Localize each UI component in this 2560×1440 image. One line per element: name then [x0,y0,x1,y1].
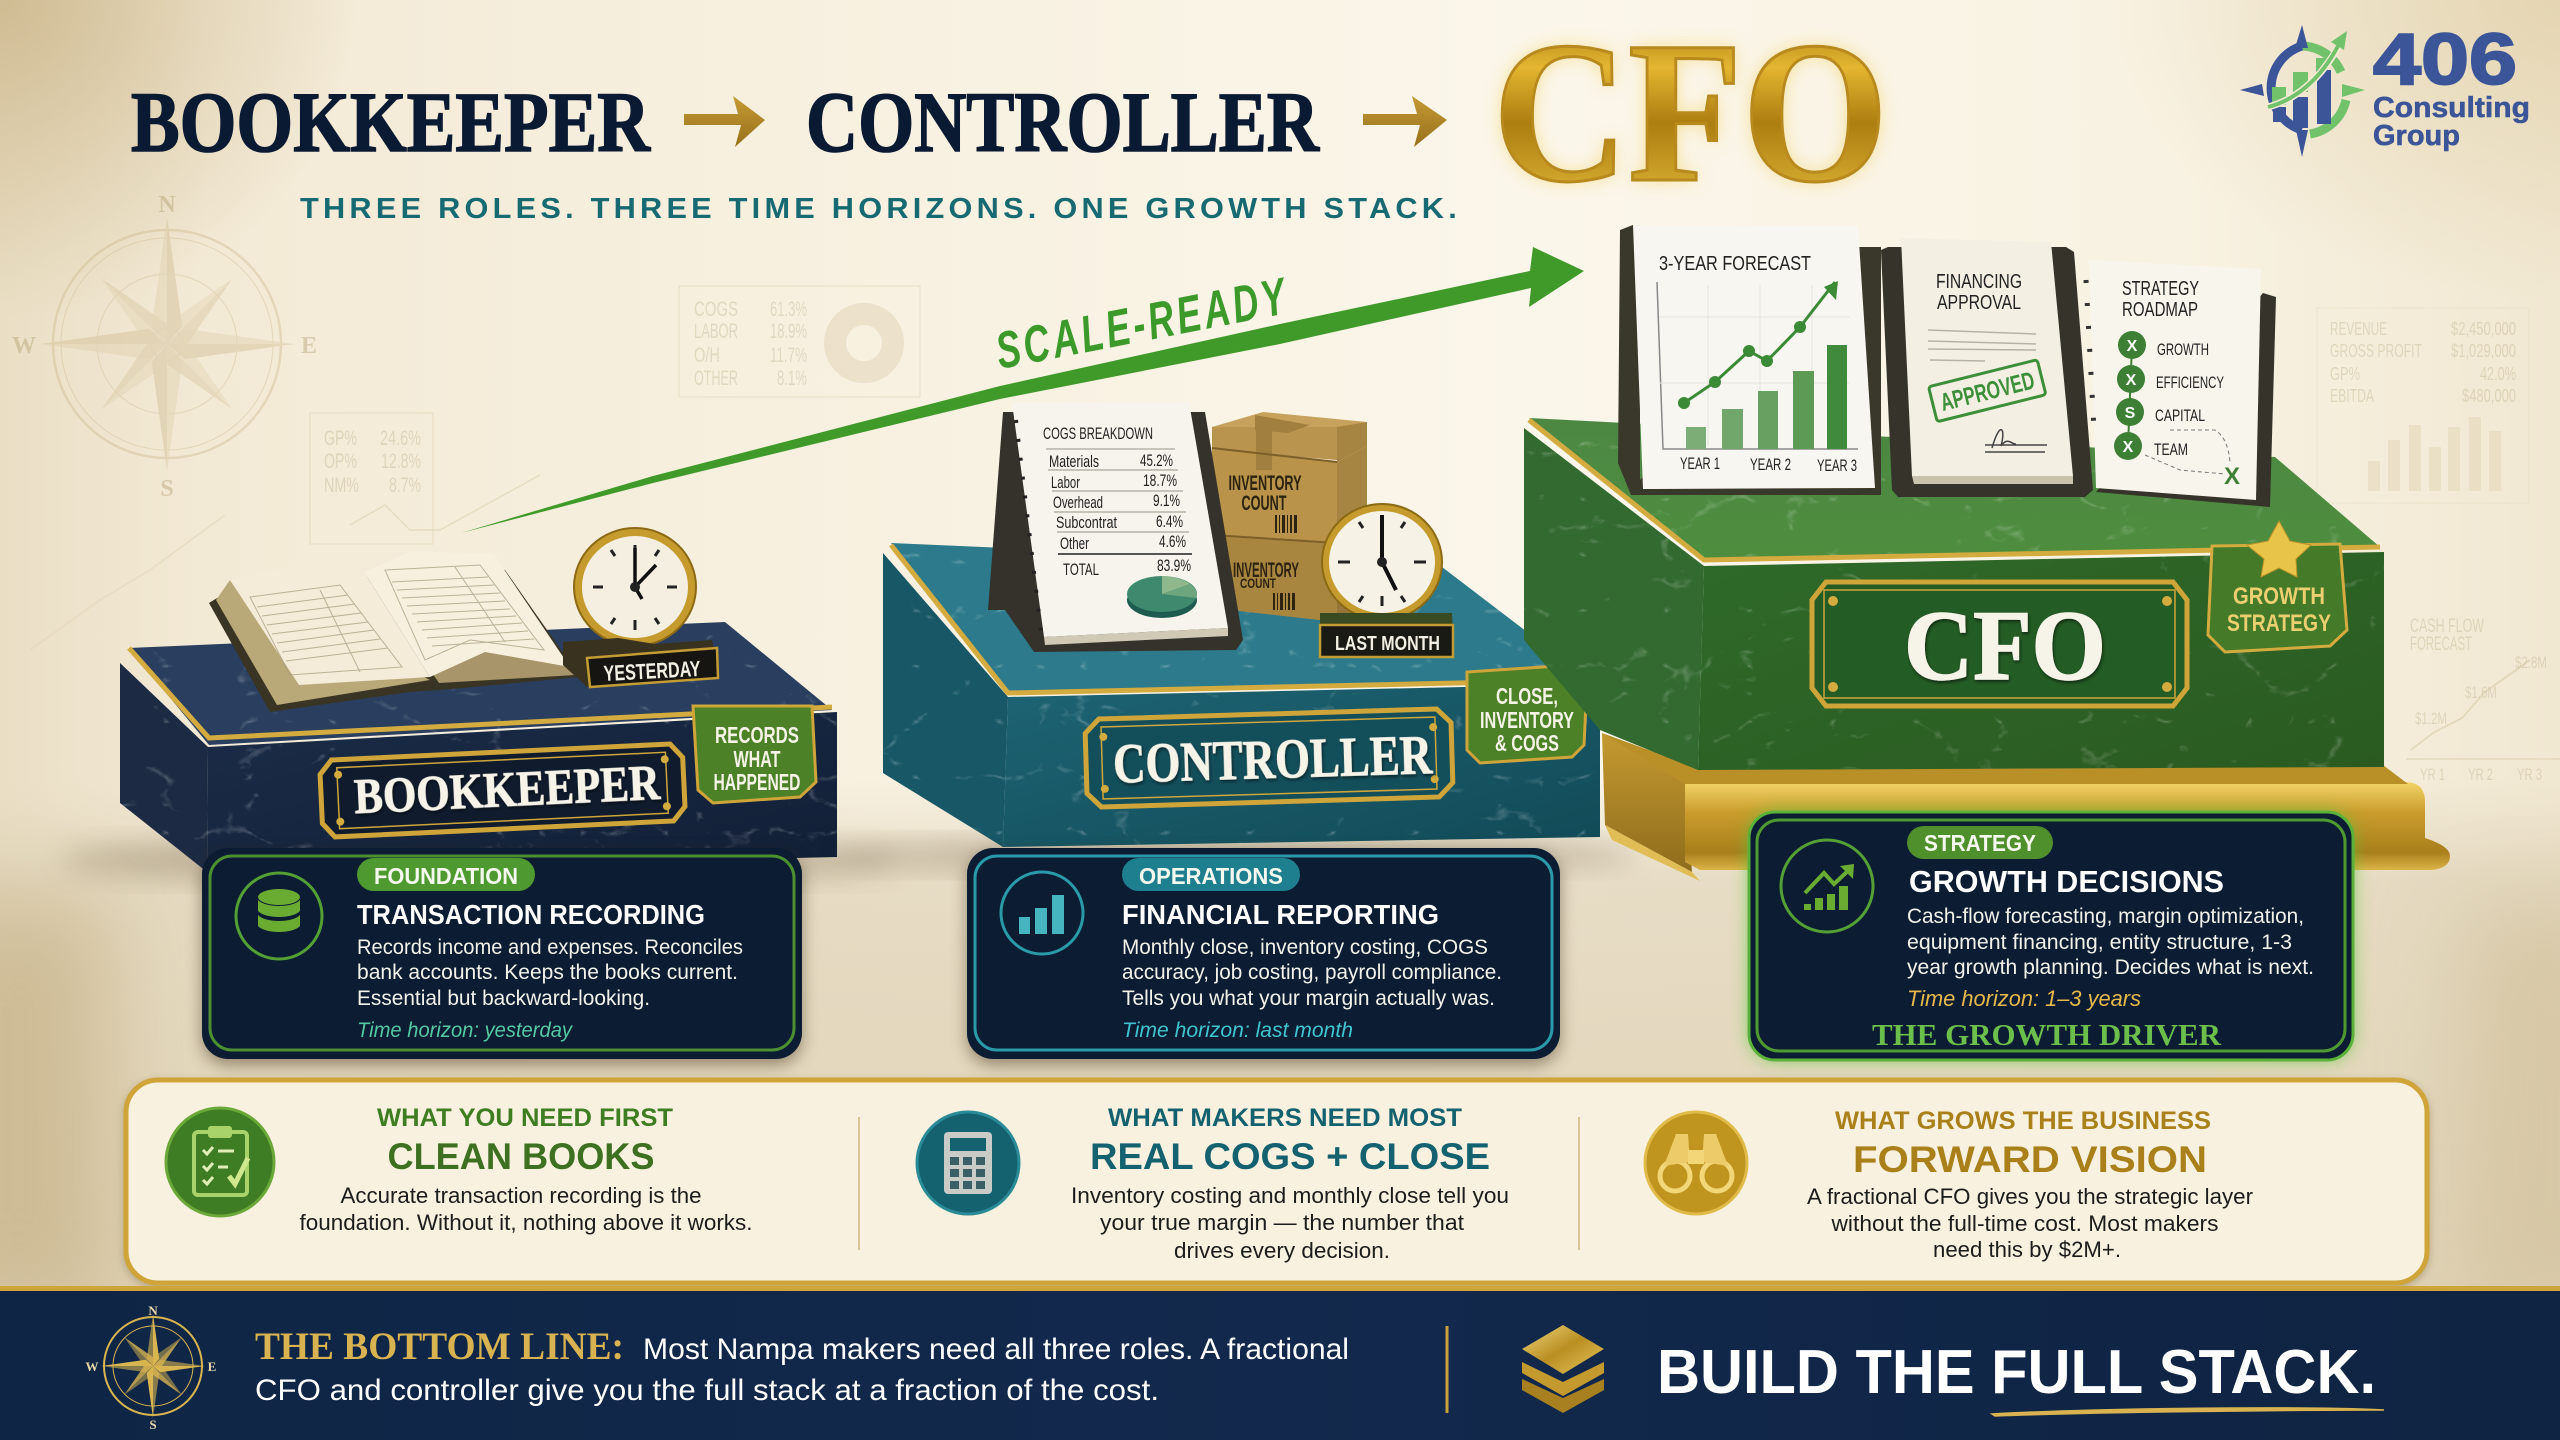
icon: open ledger book [209,552,580,712]
icon: gold layers [1522,1325,1604,1413]
icon: inventory boxes: INVENTORY [1228,472,1302,495]
pill: foundation [357,858,535,891]
faint P&L table: GROSS PROFIT [2330,341,2422,361]
arrow: bookkeeper to controller [684,96,765,147]
logo: 406 Consulting Group: 406 [2373,20,2517,100]
pill: operations [1122,858,1300,891]
column: clean books [166,1104,752,1235]
faint COGS table: 61.3% [770,298,807,321]
icon: calculator [917,1112,1019,1214]
document: strategy roadmap: EFFICIENCY [2156,373,2224,392]
body text: accuracy, job costing, payroll compliance. [1122,961,1502,984]
body text: equipment financing, entity structure, 1-3 [1907,931,2292,954]
pill: operations: OPERATIONS [1139,863,1283,889]
underline swoosh [1992,1408,2384,1416]
icon: gold compass: N [148,1303,158,1318]
tag: close, inventory and COGS [1467,664,1588,763]
document: financing approval: FINANCING [1936,271,2022,293]
column: clean books: foundation. Without it, nothing above it works. [300,1210,752,1235]
document: 3-year forecast: YEAR 1 [1680,454,1720,473]
faint P&L table [2317,308,2529,503]
body text [357,936,743,1010]
faint COGS table [679,286,920,397]
icon: COGS breakdown notebook: Overhead [1053,493,1103,512]
title: CFO [1493,0,1888,224]
icon: COGS breakdown notebook: Materials [1049,452,1099,471]
icon: COGS breakdown notebook: 83.9% [1157,556,1191,575]
column: forward vision: WHAT GROWS THE BUSINESS [1835,1107,2211,1135]
icon: COGS breakdown notebook: COGS BREAKDOWN [1043,424,1153,443]
column: real COGS and close: REAL COGS + CLOSE [1090,1136,1490,1177]
subtitle: THREE ROLES. THREE TIME HORIZONS. ONE GROWTH STACK. [300,193,1461,225]
column: real COGS and close: your true margin — the number that [1100,1210,1464,1235]
column: real COGS and close: Inventory costing and monthly close tell you [1071,1183,1509,1208]
stamp: approved: APPROVED [1937,367,2037,417]
time horizon: Time horizon: yesterday [357,1019,573,1042]
banner: bottom line [0,1286,2560,1440]
faint cash flow forecast: CASH FLOW [2410,616,2484,637]
document: financing approval: APPROVAL [1937,292,2021,314]
column: forward vision: without the full-time cost. Most makers [1830,1211,2218,1236]
faint margin table: 12.8% [381,450,421,473]
faint margin table: OP% [324,450,357,473]
faint COGS table: LABOR [694,320,738,343]
card: transaction recording [202,848,802,1059]
time horizon: Time horizon: 1–3 years [1907,986,2141,1011]
document: strategy roadmap: X [2126,372,2137,389]
icon: growth chart [1781,840,1873,932]
title: CONTROLLER [806,74,1320,170]
document: strategy roadmap: TEAM [2154,440,2188,459]
document: strategy roadmap [2086,260,2276,507]
faint COGS table: 11.7% [770,344,807,367]
title [131,0,1888,224]
tag: records what happened: WHAT [734,746,780,772]
column: clean books: CLEAN BOOKS [388,1136,654,1177]
plaque: bookkeeper: BOOKKEEPER [353,754,662,824]
pill: foundation: FOUNDATION [374,863,518,889]
tag: records what happened [693,706,816,803]
icon: gold star [2247,521,2311,577]
column: real COGS and close: WHAT MAKERS NEED MOST [1108,1104,1462,1132]
icon: bar chart [1001,872,1083,954]
bottom line text: Most Nampa makers need all three roles. A fractional [643,1333,1349,1366]
document: 3-year forecast: YEAR 2 [1750,455,1791,474]
icon: gold compass: E [208,1359,216,1374]
body text: Tells you what your margin actually was. [1122,987,1495,1010]
column: forward vision: A fractional CFO gives you the strategic layer [1807,1184,2253,1209]
heading: GROWTH DECISIONS [1909,864,2224,899]
document: strategy roadmap: S [2125,405,2136,422]
heading: FINANCIAL REPORTING [1122,899,1439,930]
plaque: bookkeeper [319,743,686,837]
column: forward vision: need this by $2M+. [1933,1237,2121,1262]
faint COGS table: COGS [694,298,738,321]
heading: TRANSACTION RECORDING [357,899,705,930]
faint cash flow forecast: YR 2 [2468,765,2493,784]
logo: 406 Consulting Group: Consulting [2373,92,2530,124]
faint cash flow forecast: FORECAST [2410,634,2472,655]
plaque: controller: CONTROLLER [1112,724,1433,796]
body text: Essential but backward-looking. [357,987,650,1010]
tagline: the growth driver: THE GROWTH DRIVER [1872,1017,2222,1052]
card: growth decisions [1749,812,2353,1060]
faint compass: S [160,476,174,502]
stamp: approved [1929,360,2046,422]
card: financial reporting [967,848,1560,1059]
call to action: BUILD THE FULL STACK. [1657,1338,2376,1407]
panel: what you need [126,1080,2427,1283]
podium block [1524,418,2384,770]
bottom line text: CFO and controller give you the full stack at a fraction of the cost. [255,1374,1159,1407]
icon: COGS breakdown notebook: 6.4% [1156,512,1183,531]
document: 3-year forecast: 3-YEAR FORECAST [1659,253,1811,275]
tag: growth strategy: STRATEGY [2227,610,2331,637]
document: strategy roadmap: X [2224,463,2240,490]
faint cash flow forecast: $1.6M [2465,683,2497,702]
faint P&L table: $2,450,000 [2451,319,2516,339]
faint compass: N [158,192,176,218]
icon: gold compass: W [86,1359,98,1374]
body text: Cash-flow forecasting, margin optimization, [1907,905,2304,928]
faint P&L table: $1,029,000 [2451,341,2516,361]
logo: 406 Consulting Group [2240,20,2530,157]
pie chart [1127,576,1197,618]
podium block [120,622,837,872]
icon: COGS breakdown notebook: 9.1% [1153,491,1180,510]
icon: gold compass: S [149,1417,157,1432]
faint cash flow forecast: $1.2M [2415,709,2447,728]
tag: growth strategy: GROWTH [2233,583,2325,610]
icon: database [236,873,322,959]
pill: strategy [1907,826,2053,859]
document: strategy roadmap: STRATEGY [2122,278,2199,300]
document: strategy roadmap: GROWTH [2157,340,2209,359]
document: 3-year forecast [1618,225,1881,495]
icon: inventory boxes: COUNT [1240,575,1276,591]
body text: bank accounts. Keeps the books current. [357,961,738,984]
document: financing approval [1881,238,2093,497]
body text [1122,936,1502,1010]
line chart [1678,281,1838,409]
body text [1907,905,2314,979]
body text: year growth planning. Decides what is next. [1907,956,2314,979]
column: real COGS and close [917,1104,1509,1263]
plaque: CFO: CFO [1904,590,2106,701]
icon: inventory boxes: INVENTORY [1233,559,1299,582]
label plate: last month [1320,613,1454,657]
bar chart [1686,345,1847,449]
faint cash flow forecast: YR 3 [2517,765,2542,784]
icon: COGS breakdown notebook: 4.6% [1159,532,1186,551]
time horizon: Time horizon: last month [1122,1019,1353,1042]
faint margin table: 24.6% [380,427,421,450]
podium: CFO [1524,225,2450,881]
faint margin table [30,413,540,650]
icon: COGS breakdown notebook: 45.2% [1140,451,1173,470]
faint P&L table: 42.0% [2480,364,2516,384]
bottom line text [255,1333,1349,1407]
tag: records what happened: RECORDS [715,722,799,748]
document: strategy roadmap: X [2127,338,2138,355]
pill: strategy: STRATEGY [1924,830,2036,856]
faint compass: W [12,333,36,359]
label plate: yesterday: YESTERDAY [603,656,701,686]
icon: inventory boxes [1212,412,1367,622]
tag: close, inventory and COGS: INVENTORY [1480,707,1574,733]
column: forward vision [1645,1107,2253,1262]
faint COGS table: OTHER [694,367,738,390]
gold base [1602,733,2450,881]
icon: COGS breakdown notebook: TOTAL [1063,560,1099,579]
title: BOOKKEEPER [131,74,651,170]
icon: binoculars [1645,1112,1747,1214]
faint P&L table: GP% [2330,364,2360,384]
document: strategy roadmap: X [2123,439,2134,456]
faint P&L table: $480,000 [2462,386,2516,406]
faint margin table: 8.7% [389,474,421,497]
icon: compass logo mark [2240,25,2365,157]
icon: COGS breakdown notebook: Labor [1051,473,1080,492]
faint cash flow forecast [2406,616,2560,784]
tag: close, inventory and COGS: & COGS [1495,730,1559,756]
title: CFO [1493,0,1888,224]
faint margin table: GP% [324,427,357,450]
faint COGS table: 18.9% [770,320,807,343]
icon: COGS breakdown notebook: Other [1060,534,1089,553]
icon: COGS breakdown notebook: 18.7% [1143,471,1177,490]
plaque: controller [1085,709,1453,807]
faint P&L table: REVENUE [2330,319,2387,339]
icon: clock yesterday [563,528,718,687]
faint P&L table: EBITDA [2330,386,2374,406]
column: forward vision: FORWARD VISION [1853,1139,2207,1180]
icon: clock last month [1320,504,1454,657]
tag: close, inventory and COGS: CLOSE, [1496,683,1558,709]
plaque: CFO [1812,582,2187,706]
column: clean books: WHAT YOU NEED FIRST [377,1104,673,1132]
document: strategy roadmap: ROADMAP [2122,299,2198,321]
label plate: yesterday [563,638,718,687]
document: strategy roadmap: CAPITAL [2155,406,2205,425]
faint compass [12,192,317,502]
faint compass: E [301,333,317,359]
tag: records what happened: HAPPENED [714,769,800,795]
icon: inventory boxes: COUNT [1242,492,1287,515]
logo: 406 Consulting Group: Group [2373,120,2460,152]
body text: Records income and expenses. Reconciles [357,936,743,959]
document: 3-year forecast: YEAR 3 [1817,456,1857,475]
icon: COGS breakdown notebook [988,402,1243,652]
bottom line heading: THE BOTTOM LINE: [255,1325,624,1368]
faint cash flow forecast: YR 1 [2420,765,2445,784]
icon: COGS breakdown notebook: Subcontrat [1056,513,1117,532]
podium: controller [840,402,1640,873]
scale-ready arrow [461,247,1584,533]
label: scale-ready: SCALE-READY [991,267,1294,381]
podium: bookkeeper [60,528,900,884]
faint COGS table: 8.1% [777,367,807,390]
column: real COGS and close: drives every decision. [1174,1238,1390,1263]
arrow: controller to CFO [1363,96,1447,147]
body text: Monthly close, inventory costing, COGS [1122,936,1488,959]
podium block [883,543,1600,847]
label plate: last month: LAST MONTH [1335,633,1440,655]
icon: clipboard [166,1108,274,1216]
column: clean books: Accurate transaction recording is the [340,1183,702,1208]
faint margin table: NM% [324,474,359,497]
tag: growth strategy [2208,521,2347,652]
faint COGS table: O/H [694,344,720,367]
icon: gold compass [86,1303,216,1432]
